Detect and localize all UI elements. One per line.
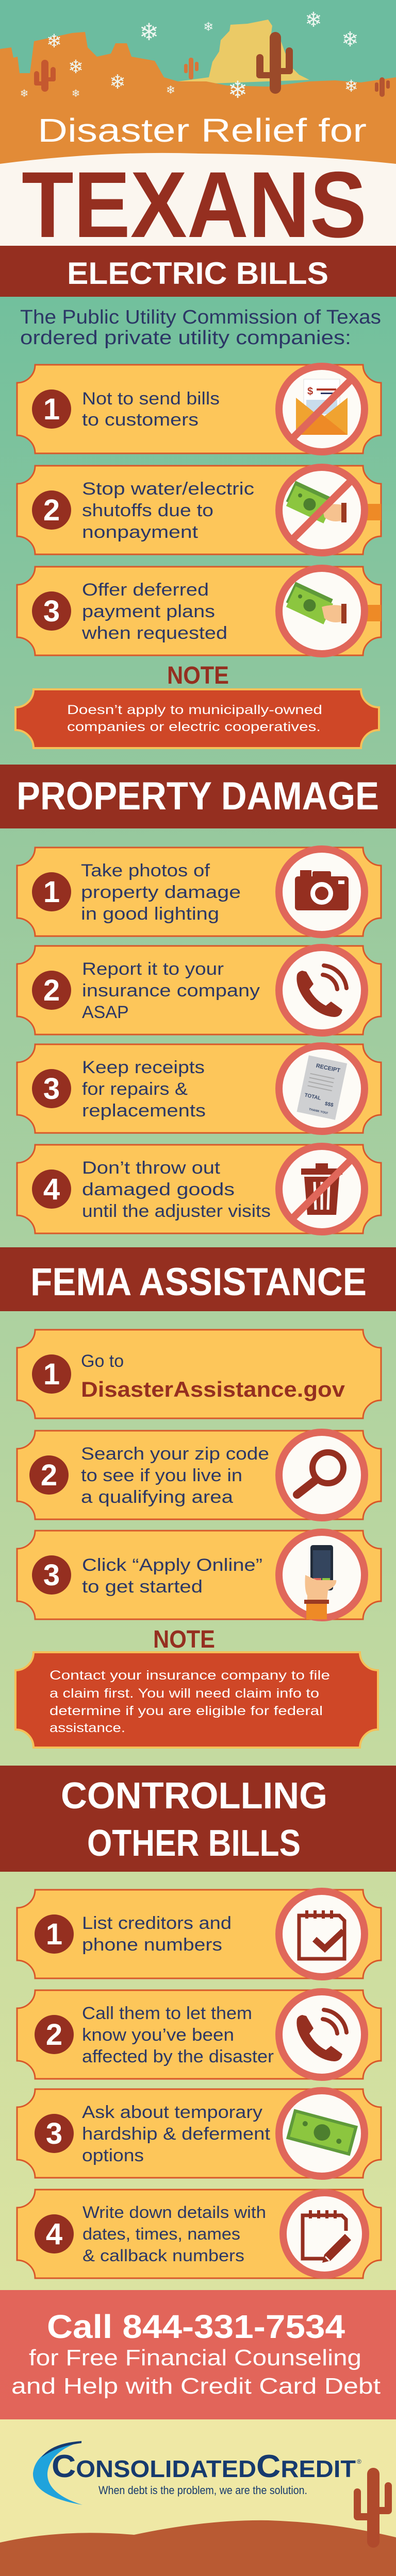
card: electric 3: Offer deferred (82, 580, 209, 600)
cactus: footer (354, 2468, 392, 2548)
card: electric 1: 1 (43, 393, 60, 426)
card: property 4 (17, 1145, 381, 1233)
card: controlling 1: 1 (46, 1918, 62, 1951)
header landscape (0, 0, 396, 246)
intro text (20, 307, 381, 349)
snowflakes: ❄ (109, 71, 126, 93)
snowflakes (20, 8, 359, 104)
card: fema 3: Click “Apply Online” (82, 1555, 262, 1575)
cactus: small (184, 58, 199, 79)
card: property 1: property damage (81, 883, 241, 902)
heading band: fema assistance (0, 1247, 396, 1311)
call to action band (0, 2290, 396, 2419)
card: property 1 (17, 848, 381, 936)
card: property 2: insurance company (82, 981, 260, 1001)
card: electric 3: 3 (43, 595, 60, 628)
card: fema 2: to see if you live in (81, 1466, 242, 1485)
icon: no money hand (279, 467, 381, 553)
card: electric 3: payment plans (82, 602, 215, 621)
card: controlling 2: affected by the disaster (82, 2047, 274, 2066)
snowflakes: ❄ (72, 87, 80, 99)
title: TEXANS: TEXANS (22, 152, 367, 257)
snowflakes: ❄ (228, 76, 248, 104)
footer background (0, 2419, 396, 2576)
icon: receipt (279, 1046, 365, 1131)
card: controlling 3: options (82, 2146, 144, 2165)
note box: fema (15, 1652, 378, 1748)
card: fema 1: Go to (81, 1351, 124, 1371)
icon: receipt: RECEIPT (316, 1063, 341, 1074)
card: controlling 4: 4 (46, 2217, 62, 2251)
cactus: left (34, 60, 56, 92)
card: controlling 1 (17, 1890, 381, 1978)
card: property 3: 3 (43, 1072, 60, 1106)
card: property 4: 4 (43, 1173, 60, 1206)
card: controlling 4: & callback numbers (82, 2246, 244, 2265)
card: electric 1: to customers (82, 410, 199, 430)
intro text: The Public Utility Commission of Texas (20, 307, 381, 328)
card: controlling 3: hardship & deferment (82, 2124, 271, 2144)
card: electric 2: shutoffs due to (82, 501, 213, 520)
card: electric 2 (17, 466, 381, 554)
note box: fema: Contact your insurance company to file (50, 1668, 330, 1683)
heading band: controlling other bills (0, 1766, 396, 1872)
card: property 4: Don’t throw out (82, 1158, 221, 1178)
card: property 2: Report it to your (82, 959, 224, 979)
card: electric 2: 2 (43, 494, 60, 527)
call to action band: for Free Financial Counseling (29, 2345, 361, 2370)
card: property 3: Keep receipts (82, 1058, 205, 1077)
icon: notepad pencil (283, 2193, 366, 2275)
card: property 2: 2 (43, 974, 60, 1007)
note heading: fema: NOTE (153, 1626, 215, 1653)
card: controlling 3: 3 (46, 2117, 62, 2150)
icon: phone (279, 947, 365, 1033)
icon: receipt: TOTAL (304, 1092, 321, 1101)
card: controlling 4: dates, times, names (82, 2225, 240, 2243)
icon: phone in hand (279, 1532, 365, 1619)
icon: no trash (279, 1146, 365, 1232)
note box: electric: companies or electric cooperatives. (67, 720, 321, 734)
icon: magnifier (279, 1432, 365, 1518)
card: electric 1 (17, 365, 381, 453)
cactus: large (256, 32, 293, 94)
call to action band: Call 844-331-7534 (47, 2308, 345, 2345)
heading band: property damage (0, 765, 396, 828)
snowflakes: ❄ (166, 84, 175, 97)
logo: consolidated credit: CONSOLIDATED CREDIT (52, 2449, 356, 2484)
snowflakes: ❄ (344, 76, 358, 96)
logo: consolidated credit: When debt is the problem, we are the solution. (98, 2484, 307, 2497)
card: property 3: for repairs & (82, 1079, 188, 1099)
card: electric 2: Stop water/electric (82, 479, 254, 499)
snowflakes: ❄ (46, 31, 62, 52)
cactus: right (375, 77, 390, 97)
heading band: controlling other bills: OTHER BILLS (87, 1823, 301, 1864)
note box: fema: assistance. (50, 1721, 125, 1735)
title: Disaster Relief for: Disaster Relief for (38, 112, 367, 149)
icon: no bills envelope: $ (307, 386, 313, 397)
logo: consolidated credit: ® (357, 2458, 361, 2465)
card: electric 1: Not to send bills (82, 389, 220, 409)
card: controlling 1: List creditors and (82, 1913, 232, 1933)
card: fema 3: to get started (82, 1577, 203, 1597)
card: fema 1: 1 (43, 1358, 60, 1391)
card: property 2: ASAP (82, 1003, 129, 1022)
card: controlling 3: Ask about temporary (82, 2103, 262, 2122)
snowflakes: ❄ (203, 20, 213, 34)
note box: electric: Doesn’t apply to municipally-owned (67, 703, 322, 717)
card: fema 2: a qualifying area (81, 1487, 233, 1507)
card: fema 2: 2 (41, 1459, 57, 1492)
icon: receipt: THANK YOU! (308, 1108, 328, 1115)
card: fema 3: 3 (43, 1558, 60, 1592)
card: property 1: 1 (43, 875, 60, 909)
icon: receipt: $$$ (324, 1101, 334, 1108)
footer ground (0, 2520, 396, 2576)
card: fema 3 (17, 1531, 381, 1619)
card: property 4: damaged goods (82, 1180, 235, 1199)
card: controlling 2: 2 (46, 2018, 62, 2052)
card: controlling 4: Write down details with (82, 2203, 266, 2222)
intro text: ordered private utility companies: (20, 327, 351, 349)
card: controlling 1: phone numbers (82, 1935, 222, 1955)
card: property 1: Take photos of (81, 861, 210, 880)
heading band: controlling other bills: CONTROLLING (61, 1775, 327, 1817)
card: property 1: in good lighting (81, 904, 219, 924)
card: fema 2 (17, 1431, 381, 1519)
icon: phone (279, 1992, 365, 2077)
card: property 3: replacements (82, 1101, 206, 1121)
card: fema 1 (17, 1330, 381, 1418)
note box: electric (15, 689, 379, 748)
card: electric 3 (17, 567, 381, 655)
snowflakes: ❄ (20, 87, 28, 99)
icon: money bill (279, 2091, 365, 2176)
card: controlling 2: Call them to let them (82, 2004, 252, 2023)
background gradient (0, 297, 396, 2291)
snowflakes: ❄ (139, 18, 159, 46)
icon: no bills envelope (279, 366, 365, 452)
card: controlling 3 (17, 2089, 381, 2178)
snowflakes: ❄ (68, 57, 84, 78)
icon: calendar check (279, 1891, 365, 1977)
card: property 3 (17, 1044, 381, 1133)
heading band: electric bills (0, 246, 396, 297)
heading band: fema assistance: FEMA ASSISTANCE (30, 1260, 367, 1304)
card: controlling 2 (17, 1990, 381, 2079)
card: controlling 2: know you’ve been (82, 2025, 234, 2045)
snowflakes: ❄ (341, 28, 359, 52)
note heading: electric: NOTE (167, 662, 229, 689)
card: property 2 (17, 946, 381, 1035)
card: electric 2: nonpayment (82, 522, 199, 542)
icon: money hand (279, 568, 381, 654)
note box: fema: a claim first. You will need claim info to (50, 1686, 319, 1701)
heading band: electric bills: ELECTRIC BILLS (67, 256, 328, 291)
call to action band: and Help with Credit Card Debt (11, 2374, 381, 2399)
note box: fema: determine if you are eligible for federal (50, 1704, 323, 1718)
card: electric 3: when requested (81, 623, 227, 643)
card: fema 2: Search your zip code (81, 1444, 269, 1464)
card: fema 1: DisasterAssistance.gov (81, 1377, 345, 1401)
card: controlling 4 (17, 2190, 381, 2278)
logo: consolidated credit (33, 2441, 361, 2505)
card: property 4: until the adjuster visits (82, 1201, 271, 1221)
snowflakes: ❄ (305, 8, 322, 32)
icon: camera (279, 849, 365, 935)
